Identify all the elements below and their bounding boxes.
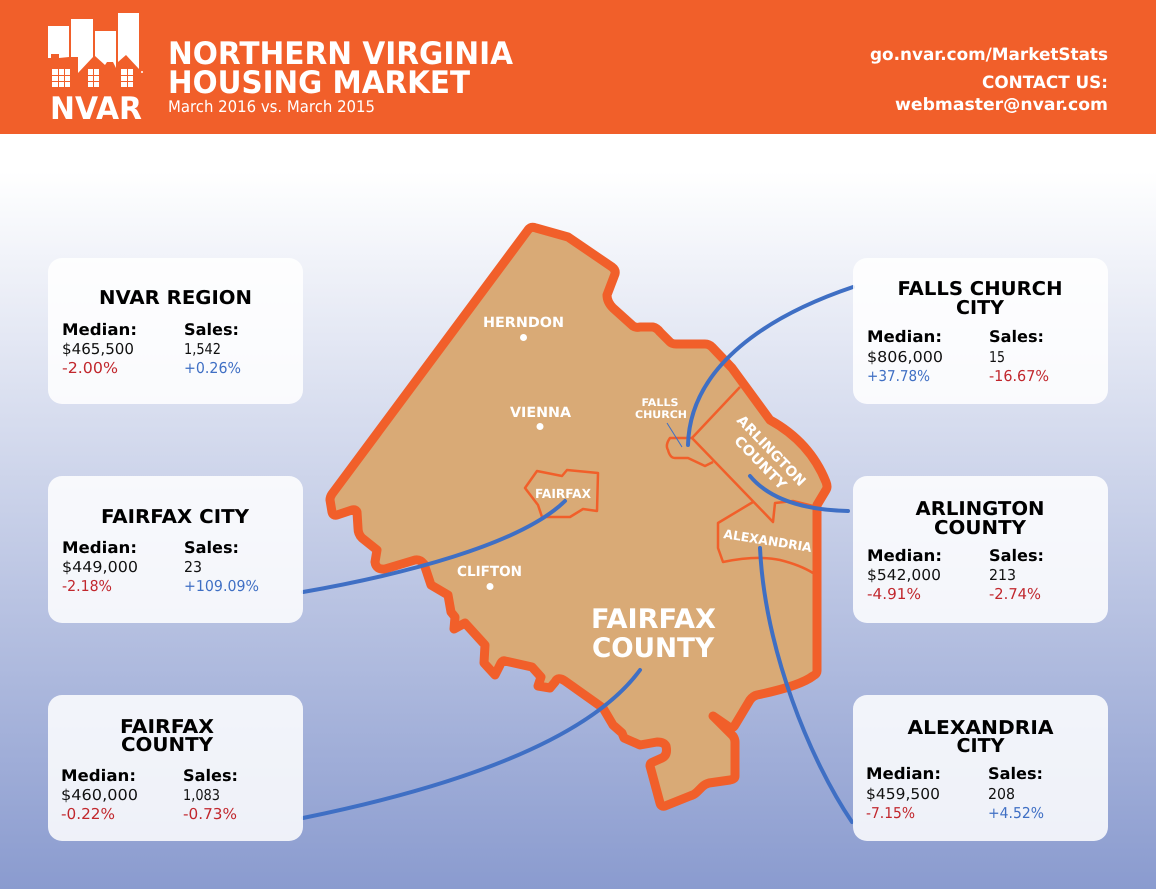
Fairfax City boundary (525, 470, 598, 517)
panel: Falls Church City: Sales: (989, 327, 1044, 346)
label: Fairfax County (591, 604, 716, 664)
panel: NVAR Region: +0.26% (184, 359, 241, 377)
panel: Falls Church City: FALLS CHURCH (898, 278, 1062, 300)
panel: Fairfax County: -0.73% (183, 805, 237, 823)
panel: Alexandria City: $459,500 (866, 785, 940, 803)
panel: Alexandria City: ALEXANDRIA (908, 717, 1054, 739)
panel: Arlington County: Sales: (989, 546, 1044, 565)
label: Arlington County: ARLINGTON (733, 413, 809, 490)
label: Falls Church (635, 397, 687, 421)
panel: Falls Church City: Median: (867, 327, 942, 346)
panel: Alexandria City: CITY (956, 735, 1005, 757)
label: Falls Church: FALLS (642, 397, 678, 409)
panel: Fairfax County: 1,083 (183, 786, 220, 804)
label: Arlington County: COUNTY (731, 433, 790, 494)
panel: Arlington County: 213 (989, 566, 1016, 584)
label: Vienna (510, 405, 571, 430)
panel: Fairfax City: 23 (184, 558, 202, 576)
panel: Fairfax County: Sales: (183, 766, 238, 785)
panel: Arlington County (853, 476, 1108, 623)
panel: Falls Church City: -16.67% (989, 367, 1049, 385)
panel: Alexandria City (853, 695, 1108, 841)
label: Falls Church: CHURCH (635, 409, 687, 421)
Arlington boundary (692, 387, 817, 522)
panel: NVAR Region (48, 258, 303, 404)
panel: Arlington County: $542,000 (867, 566, 941, 584)
title line 2: HOUSING MARKET (168, 65, 470, 101)
panel: Falls Church City: $806,000 (867, 348, 943, 366)
panel: Fairfax City (48, 476, 303, 623)
panel: Fairfax City: $449,000 (62, 558, 138, 576)
subtitle: March 2016 vs. March 2015 (168, 97, 375, 116)
Falls Church boundary (667, 438, 713, 466)
connector lines (303, 287, 853, 822)
panel: Fairfax County: COUNTY (121, 734, 213, 756)
panel: Fairfax City: FAIRFAX CITY (101, 506, 249, 528)
panel: Fairfax County (48, 695, 303, 841)
label: Herndon: HERNDON (483, 315, 564, 331)
panel: Fairfax City: Median: (62, 538, 137, 557)
title: NORTHERN VIRGINIA (168, 36, 513, 72)
panel: Fairfax County: Median: (61, 766, 136, 785)
panel: Alexandria City: +4.52% (988, 804, 1044, 822)
website: go.nvar.com/MarketStats (870, 45, 1108, 65)
header banner (0, 0, 1156, 134)
icon: NVAR logo (48, 13, 143, 127)
panel: Arlington County: COUNTY (934, 517, 1026, 539)
map of Northern Virginia (330, 227, 827, 806)
contact label: CONTACT US: (982, 73, 1108, 93)
panel: Alexandria City: Median: (866, 764, 941, 783)
panel: NVAR Region: -2.00% (62, 359, 118, 377)
panel: NVAR Region: $465,500 (62, 340, 134, 358)
panel: Fairfax City: +109.09% (184, 577, 259, 595)
contact email: webmaster@nvar.com (895, 95, 1108, 115)
label: Fairfax: FAIRFAX (535, 486, 591, 501)
panel: Fairfax County: FAIRFAX (120, 716, 214, 738)
panel: Arlington County: Median: (867, 546, 942, 565)
label: Fairfax County: FAIRFAX (591, 604, 716, 635)
panel: Fairfax County: $460,000 (61, 786, 138, 804)
panel: Fairfax City: -2.18% (62, 577, 112, 595)
panel: Arlington County: -4.91% (867, 585, 921, 603)
panel: Alexandria City: Sales: (988, 764, 1043, 783)
Alexandria boundary (718, 502, 813, 573)
panel: Arlington County: ARLINGTON (916, 498, 1044, 520)
panel: Falls Church City (853, 258, 1108, 404)
panel: NVAR Region: Sales: (184, 320, 239, 339)
panel: Falls Church City: CITY (956, 297, 1004, 319)
panel: Fairfax County: -0.22% (61, 805, 115, 823)
panel: Alexandria City: -7.15% (866, 804, 915, 822)
label: Fairfax County: COUNTY (592, 633, 714, 664)
Falls Church leader (667, 423, 682, 447)
panel: Falls Church City: +37.78% (867, 367, 930, 385)
panel: NVAR Region: 1,542 (184, 340, 221, 358)
panel: Arlington County: -2.74% (989, 585, 1041, 603)
panel: Fairfax City: Sales: (184, 538, 239, 557)
panel: Alexandria City: 208 (988, 785, 1015, 803)
label: Herndon (483, 315, 564, 341)
icon: NVAR logo: NVAR (50, 91, 142, 127)
label: Alexandria: ALEXANDRIA (723, 526, 813, 555)
label: Clifton (457, 564, 522, 590)
panel: Falls Church City: 15 (989, 348, 1005, 366)
label: Vienna: VIENNA (510, 405, 571, 421)
panel: NVAR Region: NVAR REGION (99, 287, 252, 309)
label: Clifton: CLIFTON (457, 564, 522, 580)
panel: NVAR Region: Median: (62, 320, 137, 339)
